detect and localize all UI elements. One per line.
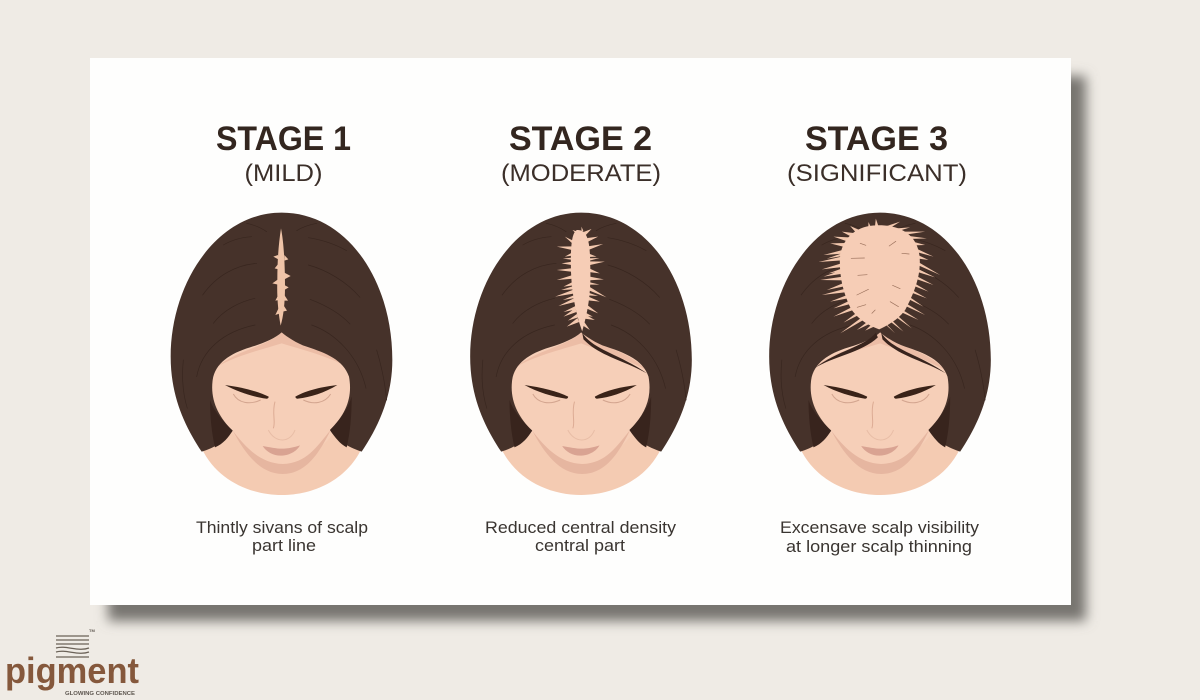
- subheading: moderate: (MODERATE): [501, 160, 661, 187]
- illustration: head stage 2: [470, 213, 692, 495]
- panel: white card: [90, 58, 1071, 605]
- tagline: GLOWING CONFIDENCE: [65, 691, 135, 697]
- description: stage 2: central part: [535, 536, 625, 555]
- panel: stage 2: [470, 120, 692, 555]
- panel: stage 3: [769, 120, 991, 556]
- illustration: head stage 1: [171, 213, 392, 495]
- description: stage 1: Thintly sivans of scalp: [196, 518, 368, 537]
- illustration: head stage 3: [769, 213, 991, 495]
- panel: stage 1: [171, 120, 392, 555]
- icon: layered lines: [56, 636, 89, 657]
- wordmark: pigment: [5, 650, 139, 691]
- description: stage 1: part line: [252, 536, 316, 555]
- description: stage 2: Reduced central density: [485, 518, 677, 537]
- subheading: significant: (SIGNIFICANT): [787, 160, 967, 187]
- description: stage 3: Excensave scalp visibility: [780, 518, 980, 537]
- logo: pigment: [5, 628, 139, 697]
- description: stage 3: at longer scalp thinning: [786, 537, 972, 556]
- description: stage 1: [196, 518, 368, 555]
- subheading: mild: (MILD): [244, 160, 322, 187]
- description: stage 2: [485, 518, 677, 555]
- heading: stage 3: STAGE 3: [805, 120, 948, 158]
- description: stage 3: [780, 518, 980, 556]
- heading: stage 1: STAGE 1: [216, 120, 351, 158]
- trademark: TM: [89, 628, 95, 633]
- heading: stage 2: STAGE 2: [509, 120, 652, 158]
- card shadow: [108, 76, 1086, 621]
